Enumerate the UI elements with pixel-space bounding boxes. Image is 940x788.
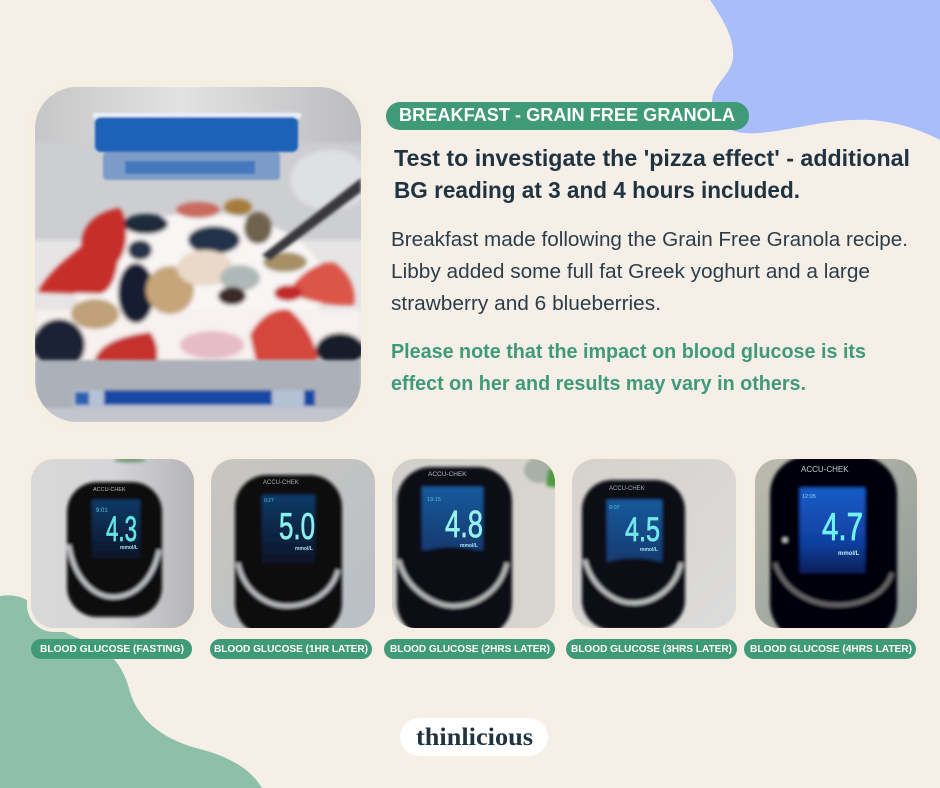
heading pill: BREAKFAST - GRAIN FREE GRANOLA: [399, 105, 735, 125]
decorative blue blob: [710, 0, 940, 140]
disclaimer: effect on her and results may vary in others.: [391, 372, 806, 395]
photo: glucose meter 1hr later: [211, 459, 375, 628]
label: 3hrs later: [566, 639, 737, 659]
photo: glucose meter 2hrs later: 13:15: [427, 497, 441, 503]
photo: glucose meter 3hrs later: 4.5: [625, 511, 660, 549]
label: 4hrs later: BLOOD GLUCOSE (4HRS LATER): [750, 643, 912, 655]
photo: glucose meter 3hrs later: [568, 455, 740, 632]
photo: glucose meter 3hrs later: ACCU-CHEK: [609, 486, 645, 492]
label: 3hrs later: BLOOD GLUCOSE (3HRS LATER): [571, 643, 732, 655]
photo: glucose meter 4hrs later: mmol/L: [838, 551, 860, 557]
test heading: BG reading at 3 and 4 hours included.: [394, 177, 800, 203]
disclaimer: Please note that the impact on blood glucose is its: [391, 340, 866, 363]
label: 1hr later: BLOOD GLUCOSE (1HR LATER): [214, 643, 368, 655]
photo: glucose meter 3hrs later: mmol/L: [640, 547, 658, 553]
photo: glucose meter fasting: ACCU-CHEK: [93, 487, 126, 493]
label: fasting: [31, 639, 192, 659]
photo: glucose meter 4hrs later: 12:05: [802, 494, 816, 500]
photo: glucose meter 4hrs later: [755, 459, 917, 628]
logo: thinlicious: thinlicious: [416, 724, 533, 751]
photo: glucose meter 4hrs later: ACCU-CHEK: [801, 465, 849, 474]
test heading: [394, 145, 910, 203]
photo: glucose meter 2hrs later: ACCU-CHEK: [428, 471, 467, 478]
label: 2hrs later: BLOOD GLUCOSE (2HRS LATER): [390, 643, 550, 655]
description: Breakfast made following the Grain Free Granola recipe.: [391, 229, 908, 251]
description: strawberry and 6 blueberries.: [391, 293, 661, 315]
photo: glucose meter fasting: [27, 455, 198, 632]
description: Libby added some full fat Greek yoghurt and a large: [391, 261, 870, 283]
photo: glucose meter 4hrs later: 4.7: [822, 506, 863, 549]
label: 1hr later: [210, 639, 372, 659]
heading pill: [386, 102, 749, 130]
photo: glucose meter 2hrs later: mmol/L: [460, 543, 478, 549]
photo: glucose meter fasting: 9:01: [96, 508, 108, 514]
disclaimer: [391, 340, 866, 395]
photo: glucose meter 2hrs later: 4.8: [445, 504, 483, 546]
photo: glucose meter 1hr later: 5.0: [279, 506, 315, 547]
test heading: Test to investigate the 'pizza effect' - additional: [394, 145, 910, 171]
label: 4hrs later: [744, 639, 916, 659]
photo: glucose meter 1hr later: 0:27: [264, 498, 274, 504]
logo: thinlicious: [400, 718, 548, 756]
photo: granola breakfast: [28, 80, 370, 430]
description: [391, 229, 908, 315]
photo: glucose meter fasting: mmol/L: [120, 545, 138, 551]
label: fasting: BLOOD GLUCOSE (FASTING): [40, 643, 184, 655]
photo: glucose meter 3hrs later: 9:07: [609, 505, 620, 511]
photo: glucose meter 1hr later: ACCU-CHEK: [263, 480, 299, 486]
decorative green blob: [0, 595, 262, 788]
label: 2hrs later: [384, 639, 555, 659]
photo: glucose meter 1hr later: mmol/L: [295, 546, 313, 552]
photo: glucose meter 2hrs later: [392, 459, 555, 628]
photo: glucose meter fasting: 4.3: [106, 510, 137, 549]
